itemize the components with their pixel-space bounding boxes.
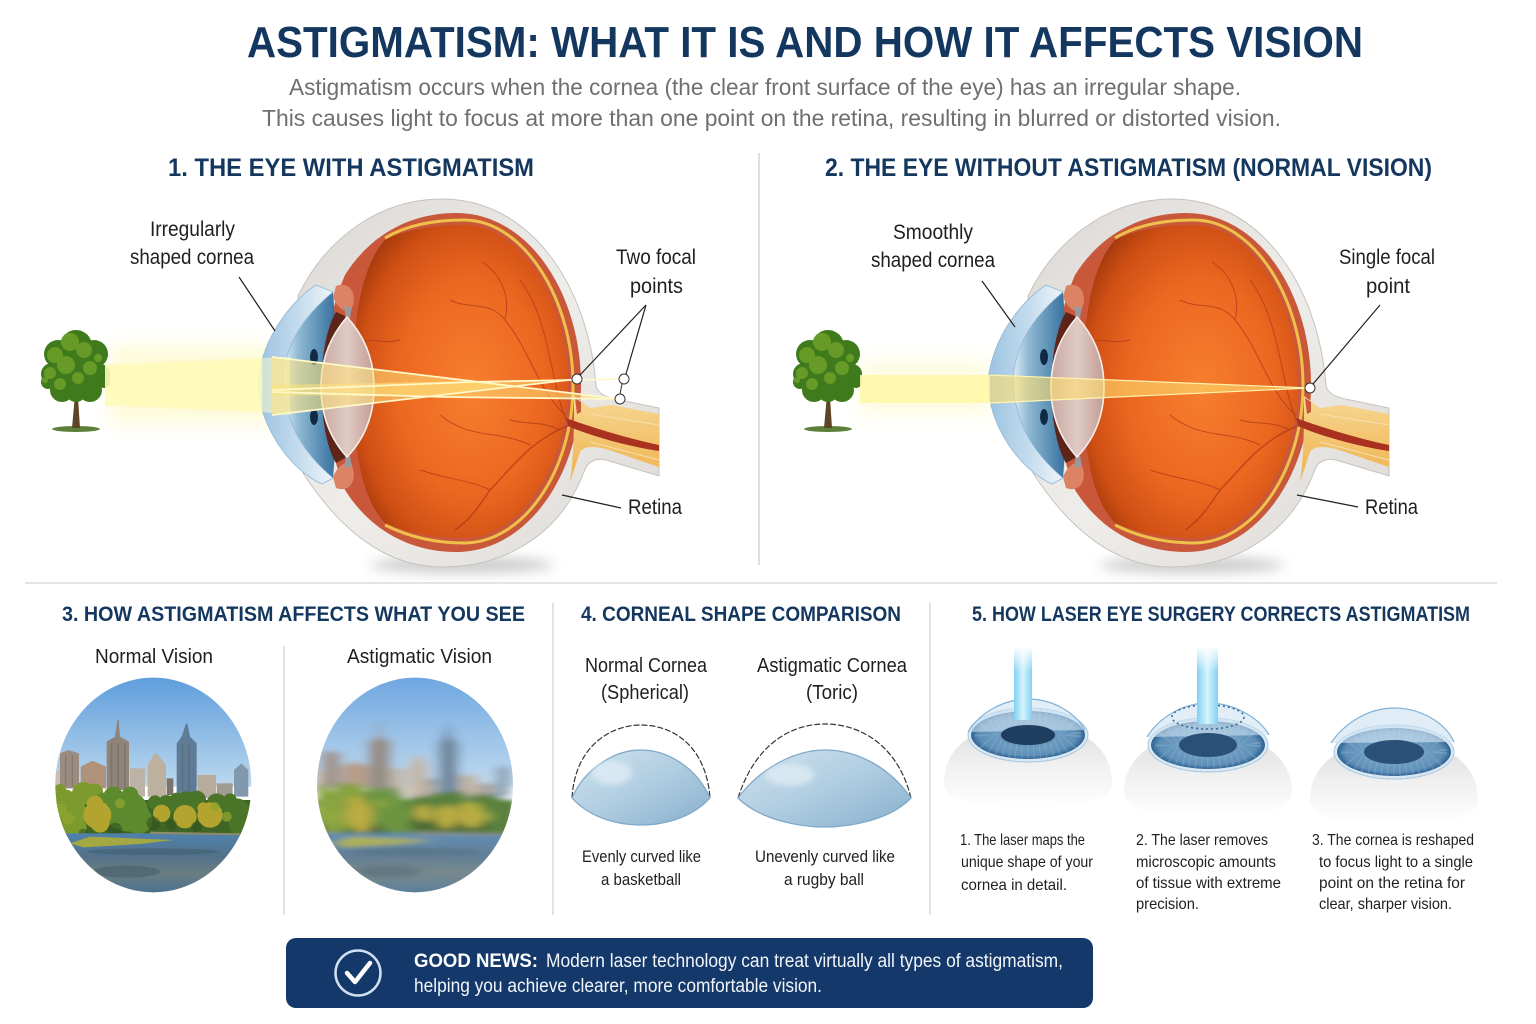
label: normal cornea: Normal Cornea [585,655,708,677]
label: irregularly shaped cornea: Irregularly [150,218,235,241]
icon: check mark [336,950,380,996]
icon: tree [41,330,110,432]
panel: corneal shape comparison [572,603,911,889]
label: retina: Retina [1365,496,1418,519]
light glow [110,345,275,425]
step 2 text: of tissue with extreme [1136,875,1281,892]
heading: 4. CORNEAL SHAPE COMPARISON [581,603,901,626]
caption: basketball: a basketball [601,870,681,889]
heading: 3. HOW ASTIGMATISM AFFECTS WHAT YOU SEE [62,603,525,626]
illustration: reshaped cornea [1310,708,1478,824]
step 2 text: precision. [1136,896,1199,913]
banner text: helping you achieve clearer, more comfortable vision. [414,976,822,997]
light glow [860,360,990,415]
title: ASTIGMATISM: WHAT IT IS AND HOW IT AFFECTS VISION [247,18,1363,67]
step 3 text [1312,832,1474,913]
heading: section 1: 1. THE EYE WITH ASTIGMATISM [168,154,534,182]
label: single focal point: Single focal [1339,246,1435,269]
banner text: GOOD NEWS: [414,951,538,972]
light rays [860,375,1310,403]
label: smoothly shaped cornea: shaped cornea [871,249,995,272]
caption: rugby ball: a rugby ball [784,870,864,889]
diagram: toric cornea [738,724,911,827]
focal point marker [1305,383,1315,393]
subtitle text: This causes light to focus at more than one point on the retina, resulting in blurred or distorted vision. [262,105,1281,131]
panel: how laser eye surgery corrects astigmatism [944,603,1478,913]
label: irregularly shaped cornea: shaped cornea [130,246,254,269]
leader lines [982,281,1380,507]
label: normal vision: Normal Vision [95,646,213,668]
image: sharp city view [55,678,252,892]
step 2 text: microscopic amounts [1136,854,1276,871]
caption: rugby ball [755,847,895,889]
step 2 text [1136,832,1281,913]
eye cross-section [258,199,659,573]
banner text: Modern laser technology can treat virtually all types of astigmatism, [546,951,1063,972]
label: two focal points [616,246,696,298]
focal point markers [572,374,629,404]
step 3 text: point on the retina for [1319,875,1466,892]
step 1 text [960,832,1094,894]
step 1 text: cornea in detail. [961,877,1067,894]
label: smoothly shaped cornea: Smoothly [893,221,973,244]
label: irregularly shaped cornea [130,218,254,269]
subtitle text [262,74,1281,131]
illustration: laser mapping [944,646,1112,807]
panel: eye with astigmatism [41,199,696,573]
illustration: tissue removal [1124,646,1292,817]
panel: eye without astigmatism [793,199,1435,573]
step 3 text: clear, sharper vision. [1319,896,1452,913]
subtitle text: Astigmatism occurs when the cornea (the clear front surface of the eye) has an irregular shape. [289,74,1241,100]
step 2 text: 2. The laser removes [1136,832,1268,849]
eye cross-section [988,199,1389,573]
step 1 text: unique shape of your [961,854,1094,871]
caption: rugby ball: Unevenly curved like [755,847,895,866]
step 3 text: 3. The cornea is reshaped [1312,832,1474,849]
label: two focal points: points [630,275,683,298]
image: blurred city view [317,678,513,892]
label: normal cornea [585,655,708,704]
leader lines [239,277,646,508]
callout: good news banner [286,938,1093,1008]
label: astigmatic vision: Astigmatic Vision [347,646,492,668]
label: astigmatic cornea: Astigmatic Cornea [757,655,908,677]
label: astigmatic cornea: (Toric) [806,682,858,704]
caption: basketball [582,847,701,889]
step 1 text: 1. The laser maps the [960,832,1085,849]
light rays [105,357,624,415]
label: astigmatic cornea [757,655,908,704]
icon: tree [793,330,862,432]
label: single focal point [1339,246,1435,298]
label: two focal points: Two focal [616,246,696,269]
panel: how astigmatism affects what you see [40,603,535,900]
step 3 text: to focus light to a single [1319,854,1473,871]
diagram: spherical cornea [572,725,710,825]
heading: section 2: 2. THE EYE WITHOUT ASTIGMATISM (NORMAL VISION) [825,154,1432,182]
label: normal cornea: (Spherical) [601,682,689,704]
banner text [414,951,1063,997]
label: retina: Retina [628,496,682,519]
label: single focal point: point [1366,275,1410,298]
label: smoothly shaped cornea [871,221,995,272]
caption: basketball: Evenly curved like [582,847,701,866]
